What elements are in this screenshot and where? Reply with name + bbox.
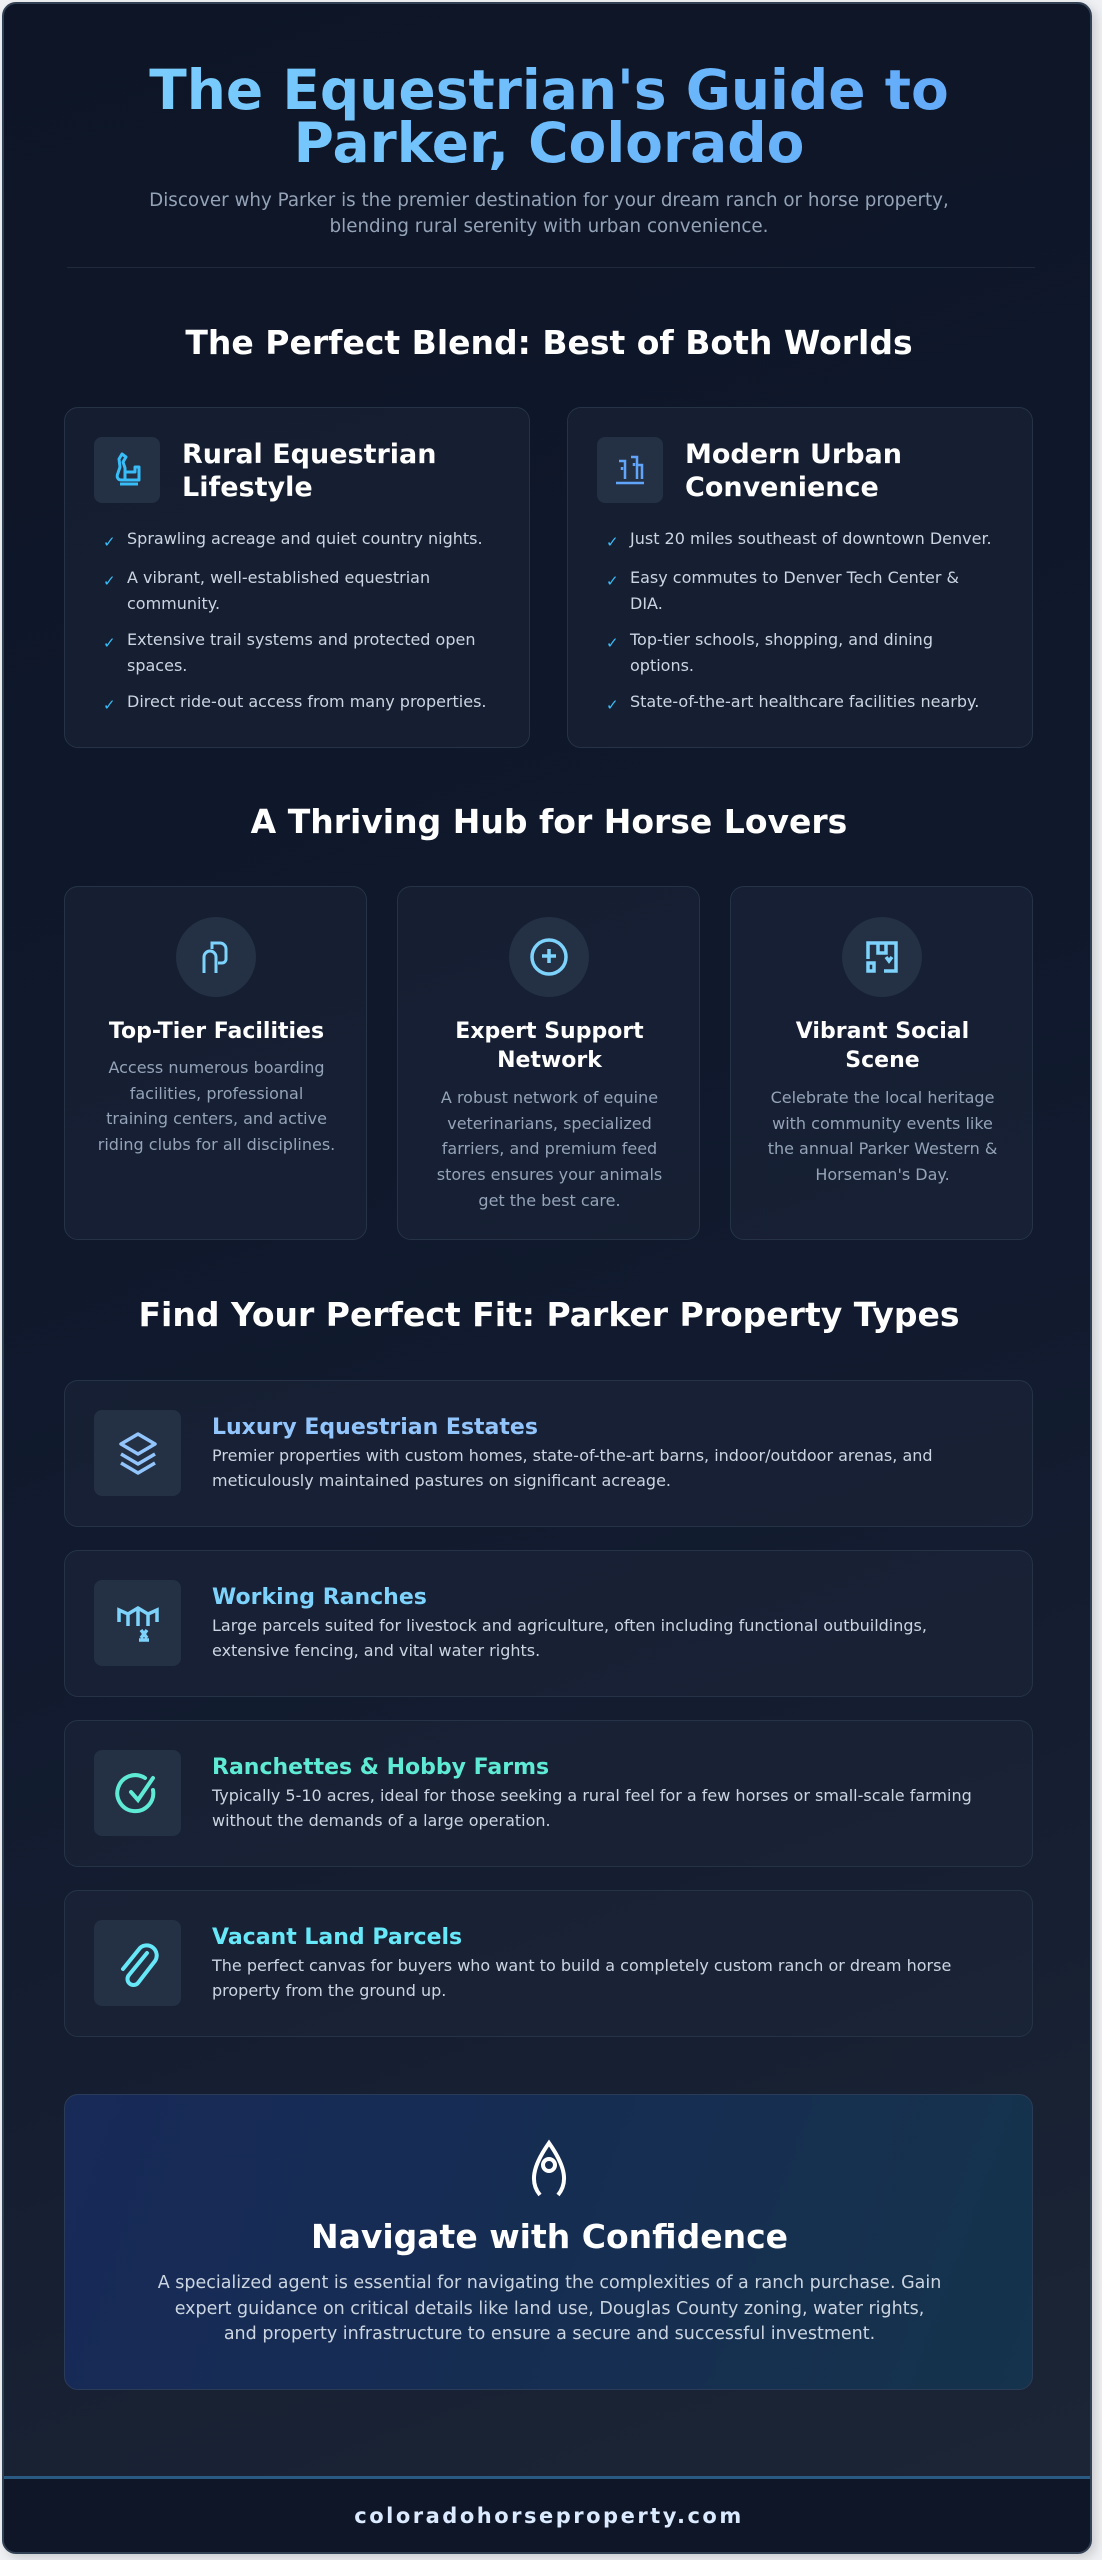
bullet list: Just 20 miles southeast of downtown Denver. [630,529,992,548]
panel: rural: ✓ [103,533,116,551]
desc [768,1088,997,1184]
card title: Lifestyle [182,472,313,503]
icon: horse [94,437,160,503]
title [4,64,1094,170]
desc: Horseman's Day. [815,1165,950,1184]
callout: navigate with confidence [64,2094,1033,2390]
title: Parker, Colorado [294,111,804,175]
panel: social [730,886,1033,1240]
icon: check circle [94,1750,181,1836]
card title [685,439,902,503]
subtitle: blending rural serenity with urban convenience. [330,216,768,237]
bullet list: Top-tier schools, shopping, and dining [630,630,933,649]
bullet list: DIA. [630,594,663,613]
card title [182,439,436,503]
panel: urban [567,407,1033,748]
heading: property types: Find Your Perfect Fit: Parker Property Types [139,1295,959,1334]
desc [437,1088,662,1210]
icon: location drop [532,2140,566,2196]
icon: map [94,1580,181,1666]
card title: Expert Support [455,1019,644,1044]
title: Vacant Land Parcels [212,1925,462,1950]
card title: Scene [845,1048,920,1073]
icon: layers [94,1410,181,1496]
bullet list [606,529,992,714]
desc: get the best care. [478,1191,621,1210]
panel: vacant land [64,1890,1033,2037]
panel: urban: ✓ [606,533,619,551]
heading: perfect blend: The Perfect Blend: Best of Both Worlds [185,323,913,362]
panel: working ranches [64,1550,1033,1697]
card title: Convenience [685,472,879,503]
desc: Premier properties with custom homes, state-of-the-art barns, indoor/outdoor arenas, and meticulously maintained pastures on significant acreage. [212,1446,933,1490]
icon: city [597,437,663,503]
panel: urban: ✓ [606,696,619,714]
desc: facilities, professional [130,1084,303,1103]
bullet list: Sprawling acreage and quiet country nights. [127,529,483,548]
title: Ranchettes & Hobby Farms [212,1755,549,1780]
desc: veterinarians, specialized [447,1114,652,1133]
panel: rural [64,407,530,748]
panel: facilities [64,886,367,1240]
bullet list: options. [630,656,694,675]
desc: training centers, and active [106,1109,327,1128]
panel: urban: ✓ [606,634,619,652]
desc: Celebrate the local heritage [771,1088,994,1107]
icon: plus circle [509,917,589,997]
desc: stores ensures your animals [437,1165,662,1184]
desc: Access numerous boarding [108,1058,325,1077]
bullet list: Easy commutes to Denver Tech Center & [630,568,959,587]
panel: rural: ✓ [103,634,116,652]
panel: luxury estates [64,1380,1033,1527]
desc: farriers, and premium feed [442,1139,657,1158]
card title: Rural Equestrian [182,439,436,470]
panel: rural: ✓ [103,572,116,590]
callout text: A specialized agent is essential for navigating the complexities of a ranch purchase. Gain [158,2273,941,2293]
heading: thriving hub: A Thriving Hub for Horse Lovers [251,802,847,841]
panel: urban: ✓ [606,572,619,590]
desc: the annual Parker Western & [768,1139,997,1158]
desc: Typically 5-10 acres, ideal for those seeking a rural feel for a few horses or small-scale farming without the demands of a large operation. [212,1786,972,1830]
card title [796,1019,969,1073]
icon: calendar [842,917,922,997]
bullet list: community. [127,594,220,613]
card title: Top-Tier Facilities [109,1019,324,1044]
desc: riding clubs for all disciplines. [98,1135,335,1154]
bullet list [103,529,487,714]
panel: support [397,886,700,1240]
bullet list: Extensive trail systems and protected open [127,630,475,649]
desc: with community events like [772,1114,993,1133]
card title: Vibrant Social [796,1019,969,1044]
footer [4,2476,1094,2556]
icon: paperclip [94,1920,181,2006]
footer url: coloradohorseproperty.com [354,2504,744,2528]
callout text: expert guidance on critical details like land use, Douglas County zoning, water rights, [175,2298,924,2318]
card title [455,1019,644,1073]
desc: A robust network of equine [441,1088,658,1107]
card title: Modern Urban [685,439,902,470]
title: The Equestrian's Guide to [149,58,949,122]
callout text [158,2273,941,2344]
bullet list: Direct ride-out access from many properties. [127,692,487,711]
icon: facilities [176,917,256,997]
card title: Network [497,1048,602,1073]
desc: Large parcels suited for livestock and agriculture, often including functional outbuildings, extensive fencing, and vital water rights. [212,1616,927,1660]
bullet list: A vibrant, well-established equestrian [127,568,430,587]
title: Luxury Equestrian Estates [212,1415,538,1440]
desc [98,1058,335,1154]
subtitle [149,190,949,237]
callout text: and property infrastructure to ensure a secure and successful investment. [224,2324,875,2344]
subtitle: Discover why Parker is the premier destination for your dream ranch or horse property, [149,190,949,211]
panel: rural: ✓ [103,696,116,714]
title: Working Ranches [212,1585,427,1610]
bullet list: State-of-the-art healthcare facilities nearby. [630,692,979,711]
bullet list: spaces. [127,656,187,675]
panel: ranchettes [64,1720,1033,1867]
desc: The perfect canvas for buyers who want to build a completely custom ranch or dream horse property from the ground up. [212,1956,951,2000]
callout title: Navigate with Confidence [311,2217,788,2256]
